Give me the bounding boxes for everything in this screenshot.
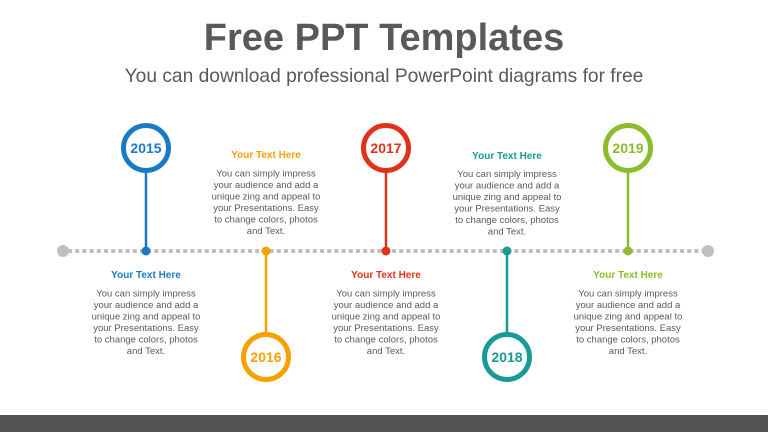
milestone 2019: 2019	[612, 140, 644, 156]
milestone 2016	[244, 246, 288, 380]
text block 2015: unique zing and appeal to	[92, 312, 200, 322]
text block 2019	[574, 270, 682, 357]
milestone 2018: 2018	[491, 349, 523, 365]
text block 2019: unique zing and appeal to	[574, 312, 682, 322]
text block 2018: You can simply impress	[457, 169, 557, 180]
text block 2015: and Text.	[127, 346, 165, 357]
text block 2019: your audience and add a	[576, 300, 681, 311]
text block 2018: unique zing and appeal to	[453, 192, 561, 203]
milestone 2019	[606, 126, 650, 256]
text block 2019: Your Text Here	[593, 270, 663, 281]
text block 2016	[212, 150, 320, 237]
timeline axis	[57, 245, 714, 257]
text block 2016: You can simply impress	[216, 168, 316, 180]
text block 2015	[92, 270, 200, 357]
text block 2017	[332, 270, 440, 357]
milestone 2017: 2017	[370, 140, 402, 156]
text block 2016: your audience and add a	[214, 180, 319, 191]
text block 2015: Your Text Here	[111, 270, 181, 281]
text block 2017: Your Text Here	[351, 270, 421, 281]
milestone 2017	[364, 126, 408, 256]
milestone 2015	[124, 126, 168, 256]
title: Free PPT Templates	[204, 17, 564, 59]
text block 2016: and Text.	[247, 226, 285, 237]
text block 2018: Your Text Here	[472, 151, 542, 162]
milestone 2015: 2015	[130, 140, 162, 156]
text block 2017: You can simply impress	[336, 288, 436, 300]
text block 2017: to change colors, photos	[334, 334, 438, 346]
text block 2018	[453, 151, 561, 238]
text block 2015: to change colors, photos	[94, 334, 198, 346]
text block 2017: your Presentations. Easy	[333, 323, 439, 334]
text block 2017: unique zing and appeal to	[332, 312, 440, 322]
text block 2019: to change colors, photos	[576, 334, 680, 346]
text block 2018: your audience and add a	[455, 180, 560, 192]
text block 2017: and Text.	[367, 346, 405, 357]
text block 2019: your Presentations. Easy	[575, 323, 681, 334]
text block 2016: to change colors, photos	[214, 214, 318, 226]
text block 2016: your Presentations. Easy	[213, 203, 319, 214]
text block 2018: and Text.	[488, 226, 526, 238]
text block 2015: You can simply impress	[96, 288, 196, 300]
text block 2015: your audience and add a	[94, 300, 199, 311]
text block 2019: You can simply impress	[578, 288, 678, 300]
text block 2018: to change colors, photos	[455, 215, 559, 226]
text block 2019: and Text.	[609, 346, 647, 357]
text block 2016: unique zing and appeal to	[212, 192, 320, 202]
text block 2015: your Presentations. Easy	[93, 323, 199, 334]
footer bar	[0, 415, 768, 432]
text block 2016: Your Text Here	[231, 150, 301, 161]
milestone 2016: 2016	[250, 349, 282, 365]
milestone 2018	[484, 246, 530, 380]
text block 2017: your audience and add a	[334, 300, 439, 311]
subtitle: You can download professional PowerPoint diagrams for free	[125, 66, 643, 87]
text block 2018: your Presentations. Easy	[454, 204, 560, 214]
